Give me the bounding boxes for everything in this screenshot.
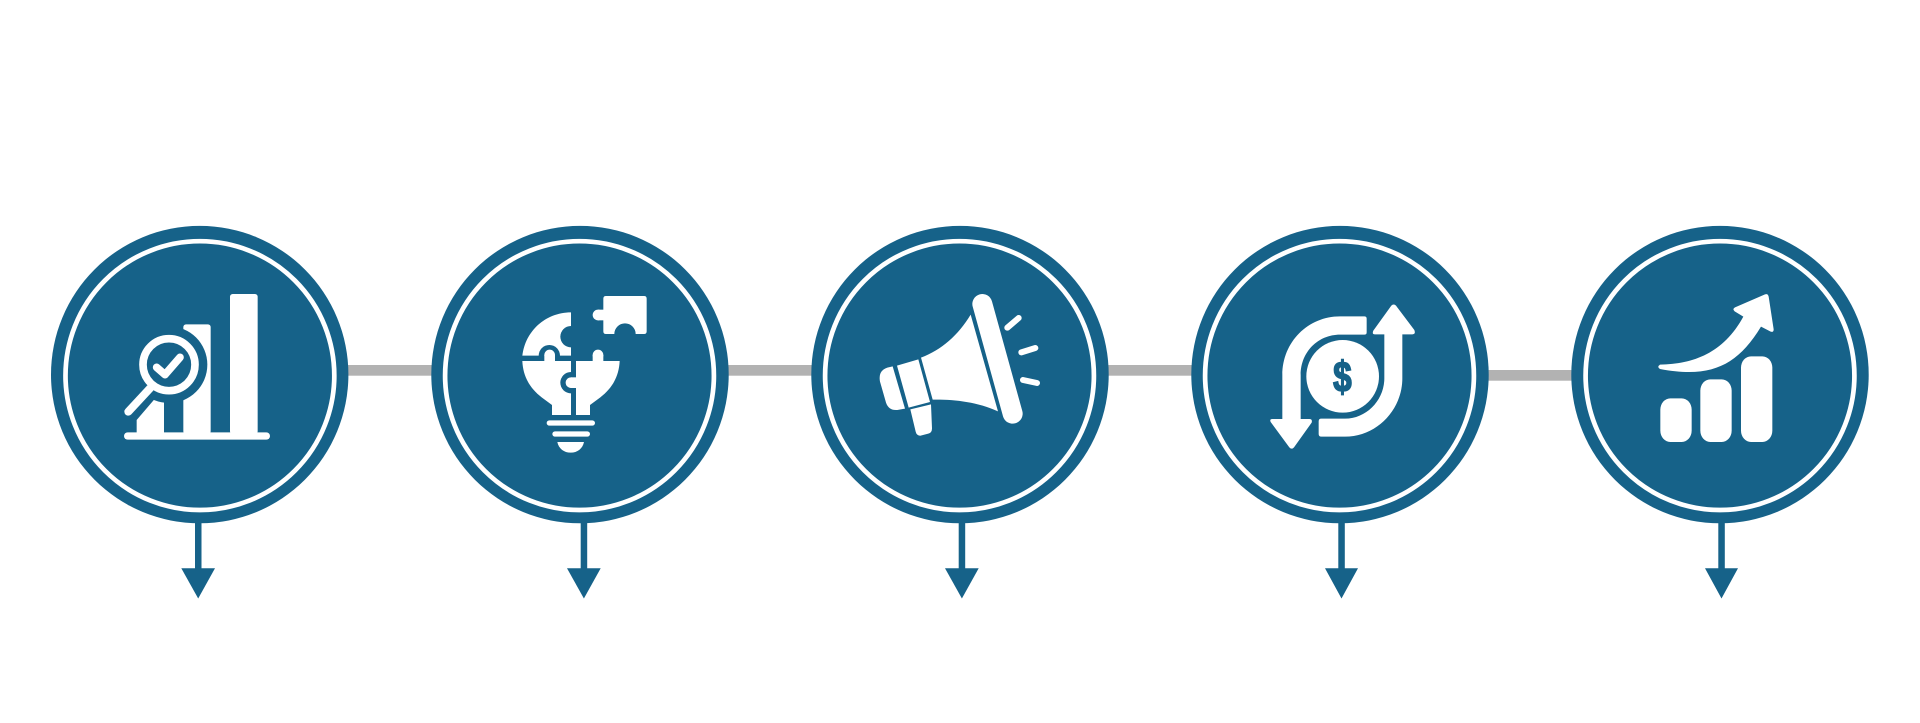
white ring — [66, 241, 334, 510]
connector: step 3 to step 4 — [1105, 365, 1195, 376]
circle badge — [431, 226, 729, 523]
step 3 badge — [811, 226, 1109, 523]
connector: step 1 to step 2 — [345, 365, 435, 376]
circle badge — [1571, 226, 1869, 523]
icon: rising bars with arrow — [1658, 294, 1774, 442]
arrow: step 3 down — [945, 520, 979, 598]
arrow: step 4 down — [1325, 520, 1358, 598]
step 5 badge — [1571, 226, 1869, 523]
arrow: step 2 down — [567, 520, 601, 598]
icon: magnifier over bar chart — [124, 294, 270, 440]
icon: puzzle light bulb — [522, 296, 647, 453]
white ring — [1205, 241, 1474, 510]
arrow: step 5 down — [1705, 520, 1738, 598]
step 2 badge — [431, 226, 729, 523]
connector: step 2 to step 3 — [725, 365, 815, 376]
circle badge — [1191, 226, 1489, 523]
white ring — [1586, 241, 1854, 510]
icon: money cycle arrows — [1270, 304, 1415, 449]
connector: step 4 to step 5 — [1485, 370, 1575, 381]
white ring — [445, 241, 714, 510]
circle badge — [51, 226, 348, 523]
icon: money cycle arrows: $ — [1333, 354, 1352, 402]
step 1 badge — [51, 226, 348, 523]
white ring — [825, 241, 1094, 510]
circle badge — [811, 226, 1109, 523]
arrow: step 1 down — [181, 520, 215, 598]
step 4 badge — [1191, 226, 1489, 523]
icon: megaphone — [880, 304, 1037, 436]
